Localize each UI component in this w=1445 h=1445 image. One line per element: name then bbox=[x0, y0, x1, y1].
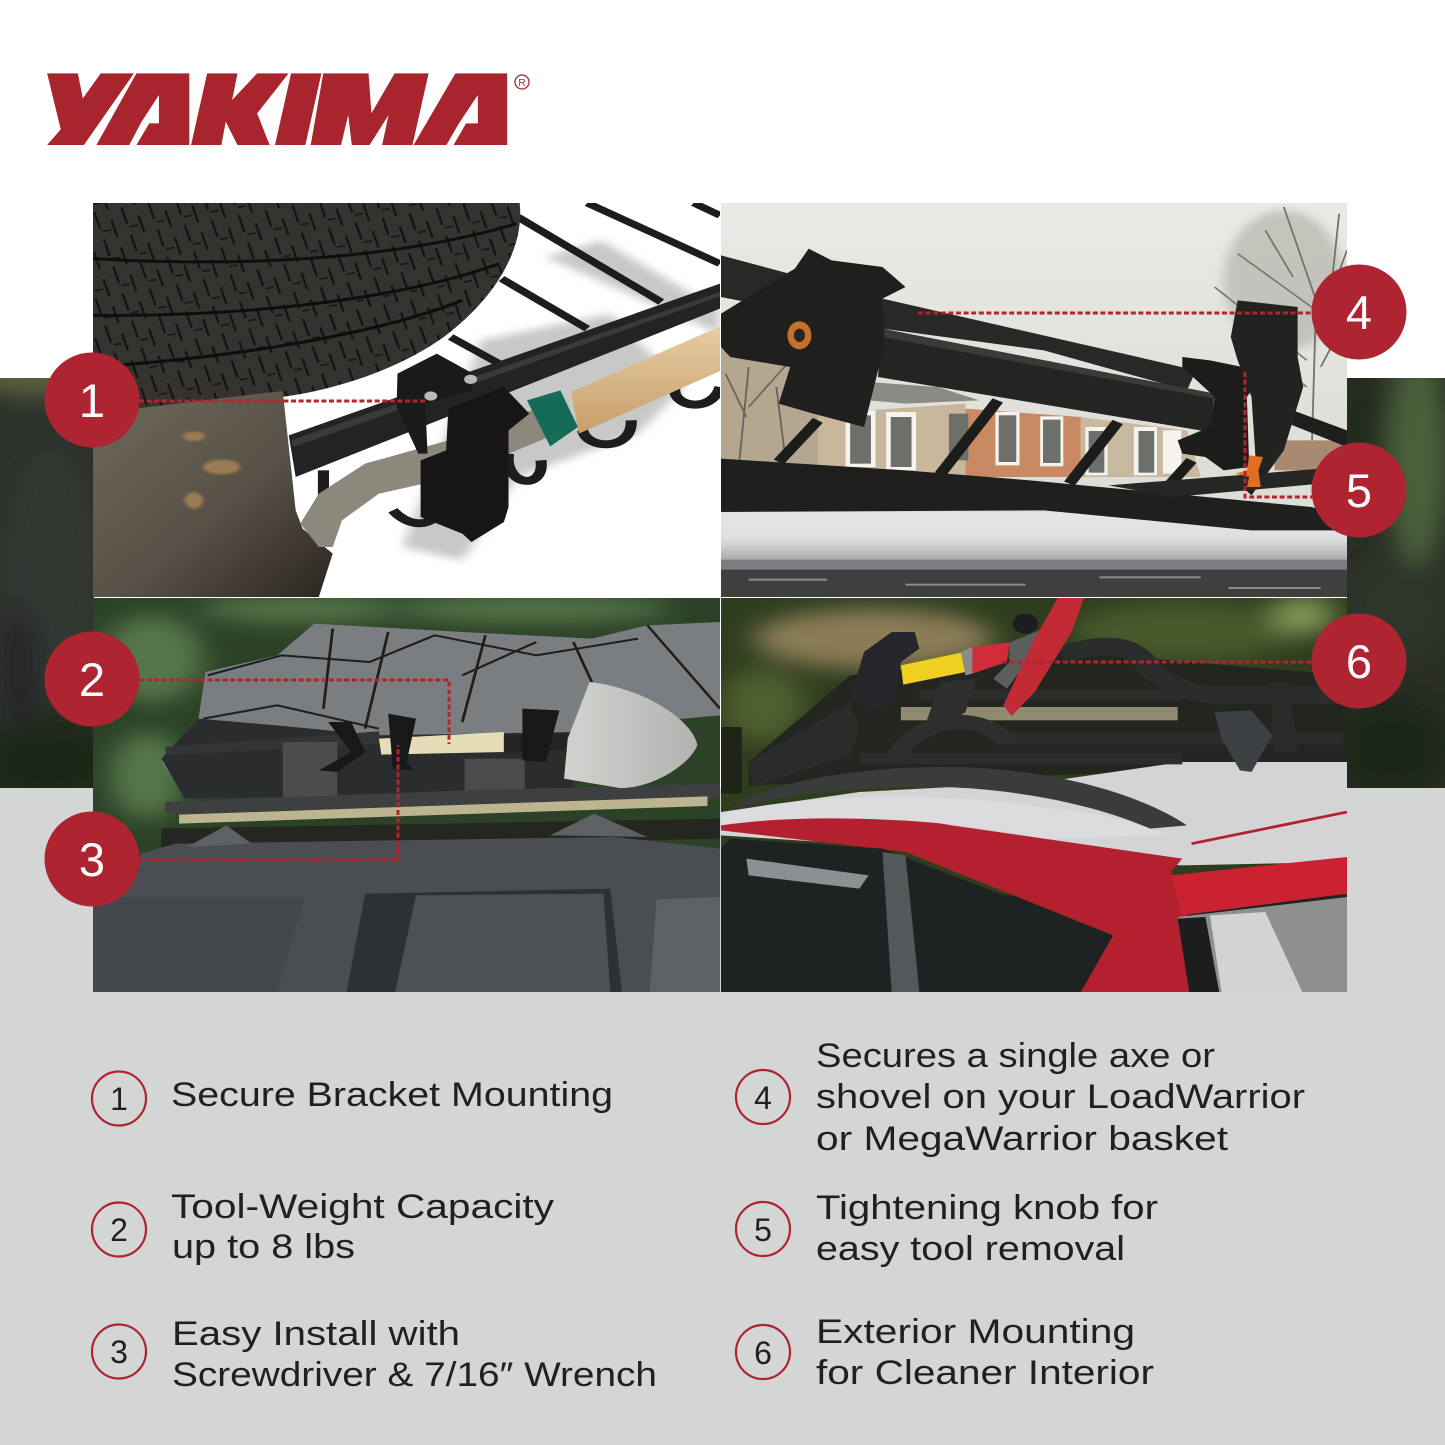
leader line 4 bbox=[918, 312, 1312, 314]
leader line 3 bbox=[139, 745, 398, 860]
badge 3: 3 bbox=[79, 833, 105, 886]
feature 2: Tool-Weight Capacity bbox=[171, 1188, 554, 1226]
feature 6 bbox=[736, 1313, 1154, 1392]
feature 2 bbox=[92, 1188, 554, 1266]
badge 5: 5 bbox=[1346, 464, 1372, 517]
badge 2 bbox=[44, 632, 140, 726]
photo 4: iced rack on red car bbox=[721, 598, 1347, 992]
feature 1 bbox=[92, 1072, 613, 1126]
feature 2: 2 bbox=[110, 1212, 128, 1248]
background: lower grey panel bbox=[0, 788, 1445, 1445]
photo 1: shovel in bracket with tire on basket bbox=[93, 203, 720, 597]
feature 1: Secure Bracket Mounting bbox=[171, 1076, 613, 1114]
photo 3: shovel on loaded basket on dark SUV bbox=[93, 598, 720, 992]
feature 6: Exterior Mounting bbox=[816, 1313, 1135, 1351]
background band: left forest bbox=[0, 378, 94, 788]
feature 3 bbox=[92, 1315, 657, 1394]
logo: YAKIMA: R bbox=[518, 78, 526, 89]
photo 2: tool mount on wet rack with house behind bbox=[721, 203, 1347, 597]
badge 4: 4 bbox=[1346, 286, 1372, 339]
badge 1 bbox=[44, 352, 140, 448]
feature 4: Secures a single axe or bbox=[816, 1037, 1215, 1075]
badge 6: 6 bbox=[1346, 635, 1372, 688]
feature 5: Tightening knob for bbox=[816, 1189, 1158, 1227]
feature 4: or MegaWarrior basket bbox=[816, 1120, 1229, 1158]
page background: white top bbox=[0, 0, 1445, 378]
feature 3: 3 bbox=[110, 1334, 128, 1370]
feature 3: Easy Install with bbox=[172, 1315, 460, 1353]
leader line 2 bbox=[139, 680, 449, 744]
leader line 5 bbox=[1245, 372, 1312, 497]
feature 5: 5 bbox=[754, 1212, 772, 1248]
feature 3: Screwdriver & 7/16″ Wrench bbox=[172, 1356, 657, 1394]
logo: YAKIMA bbox=[47, 73, 529, 145]
feature 1: 1 bbox=[110, 1081, 128, 1117]
feature 4: 4 bbox=[754, 1080, 772, 1116]
leader line 1 bbox=[139, 400, 426, 402]
badge 3 bbox=[44, 812, 140, 906]
badge 5 bbox=[1312, 442, 1406, 538]
leader line 6 bbox=[1002, 660, 1312, 664]
badge 2: 2 bbox=[79, 653, 105, 706]
background band: right forest bbox=[1347, 378, 1445, 788]
feature 2: up to 8 lbs bbox=[172, 1228, 355, 1266]
badge 1: 1 bbox=[79, 374, 105, 427]
feature 5 bbox=[736, 1189, 1158, 1268]
badge 4 bbox=[1312, 264, 1406, 360]
badge 6 bbox=[1312, 614, 1406, 708]
feature 5: easy tool removal bbox=[816, 1230, 1125, 1268]
feature 6: for Cleaner Interior bbox=[816, 1354, 1154, 1392]
feature 4 bbox=[736, 1037, 1305, 1158]
feature 6: 6 bbox=[754, 1335, 772, 1371]
feature 4: shovel on your LoadWarrior bbox=[816, 1078, 1305, 1116]
